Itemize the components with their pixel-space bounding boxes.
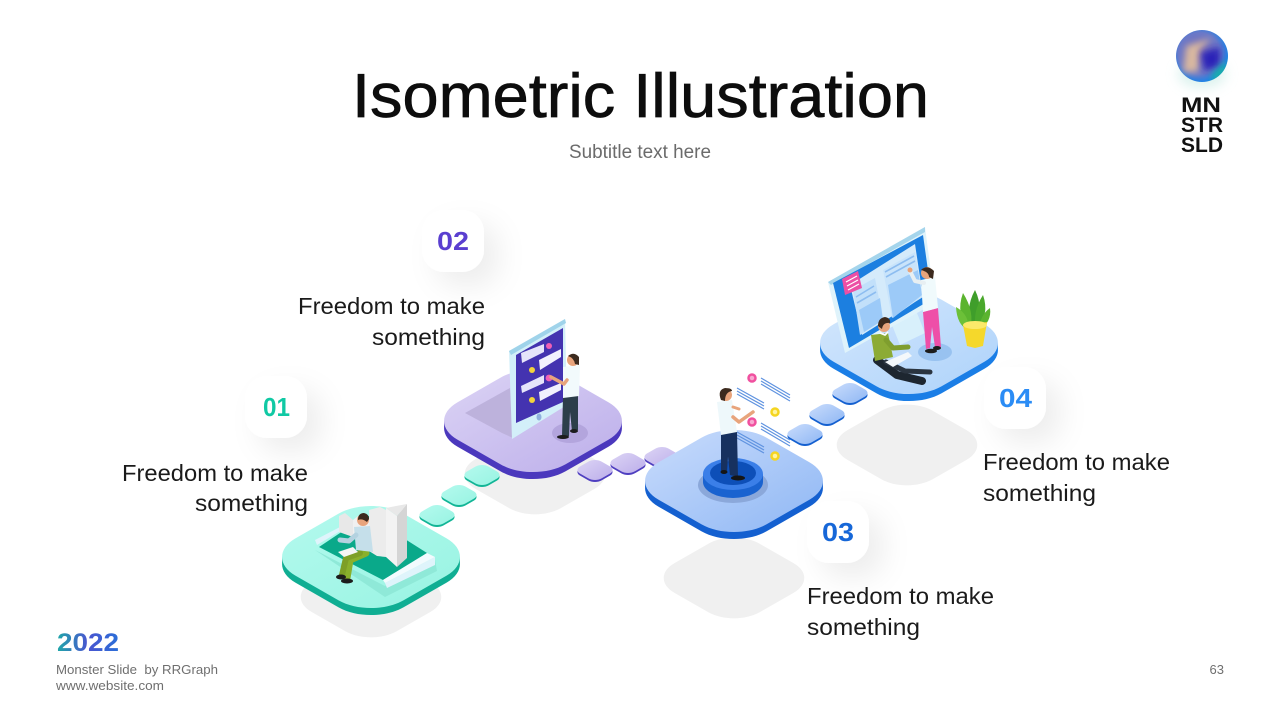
title: Isometric Illustration — [352, 62, 929, 131]
text 01: something — [195, 490, 308, 516]
footer credits — [55, 662, 218, 693]
open book — [315, 515, 437, 597]
standing person — [717, 388, 753, 480]
tablet device — [509, 319, 567, 439]
platform base — [282, 506, 460, 615]
platform 3: person with messages — [645, 374, 823, 539]
floating messages — [737, 374, 790, 460]
standing person — [551, 354, 588, 443]
logo wordmark: MN — [1181, 94, 1221, 117]
standing person — [908, 267, 952, 361]
footer credits: Monster Slide by RRGraph — [56, 662, 218, 677]
text 02: Freedom to make — [298, 293, 485, 319]
text 04: Freedom to make — [983, 449, 1170, 475]
step 02: badge and text — [298, 210, 485, 350]
text 02 — [298, 293, 485, 350]
text 03 — [807, 583, 994, 640]
step 04: badge and text — [983, 367, 1170, 506]
badge 01 — [245, 376, 307, 438]
platform 2: tablet — [444, 319, 622, 479]
ring pedestal — [698, 458, 768, 503]
subtitle: Subtitle text here — [569, 142, 711, 163]
text 01: Freedom to make — [122, 460, 308, 486]
text 04: something — [983, 480, 1096, 506]
badge 04 — [984, 367, 1046, 429]
text 03: Freedom to make — [807, 583, 994, 609]
monitor — [828, 227, 935, 353]
footer year: 2022 — [57, 629, 119, 657]
logo — [1176, 30, 1228, 157]
potted plant — [956, 290, 990, 348]
badge 04: 04 — [999, 383, 1033, 413]
platform 4: monitor, seated person and plant — [820, 227, 998, 401]
text 01 — [122, 460, 308, 516]
logo wordmark: SLD — [1181, 134, 1223, 157]
text 04 — [983, 449, 1170, 506]
logo wordmark: STR — [1181, 114, 1223, 137]
seated person — [336, 513, 373, 584]
tablet shadow — [465, 388, 513, 438]
badge 02: 02 — [437, 226, 469, 256]
teal stepping pads — [419, 465, 500, 527]
ground shadow tiles — [301, 405, 977, 637]
badge 03: 03 — [822, 517, 854, 547]
footer credits: www.website.com — [55, 678, 164, 693]
platform base — [820, 292, 998, 401]
text 02: something — [372, 324, 485, 350]
logo sphere — [1176, 30, 1228, 88]
badge 03 — [807, 501, 869, 563]
text 03: something — [807, 614, 920, 640]
platform 1: reading on a book — [282, 504, 460, 615]
step 03: badge and text — [807, 501, 994, 640]
page number: 63 — [1210, 662, 1224, 677]
platform base — [444, 370, 622, 479]
badge 01: 01 — [263, 392, 290, 422]
logo wordmark — [1181, 94, 1223, 157]
step 01: badge and text — [122, 376, 308, 516]
seated person with laptop — [871, 317, 930, 381]
blue stepping pads — [787, 383, 868, 446]
book towers — [339, 504, 407, 567]
platform base — [645, 430, 823, 539]
badge 02 — [422, 210, 484, 272]
purple stepping pads — [577, 447, 680, 482]
